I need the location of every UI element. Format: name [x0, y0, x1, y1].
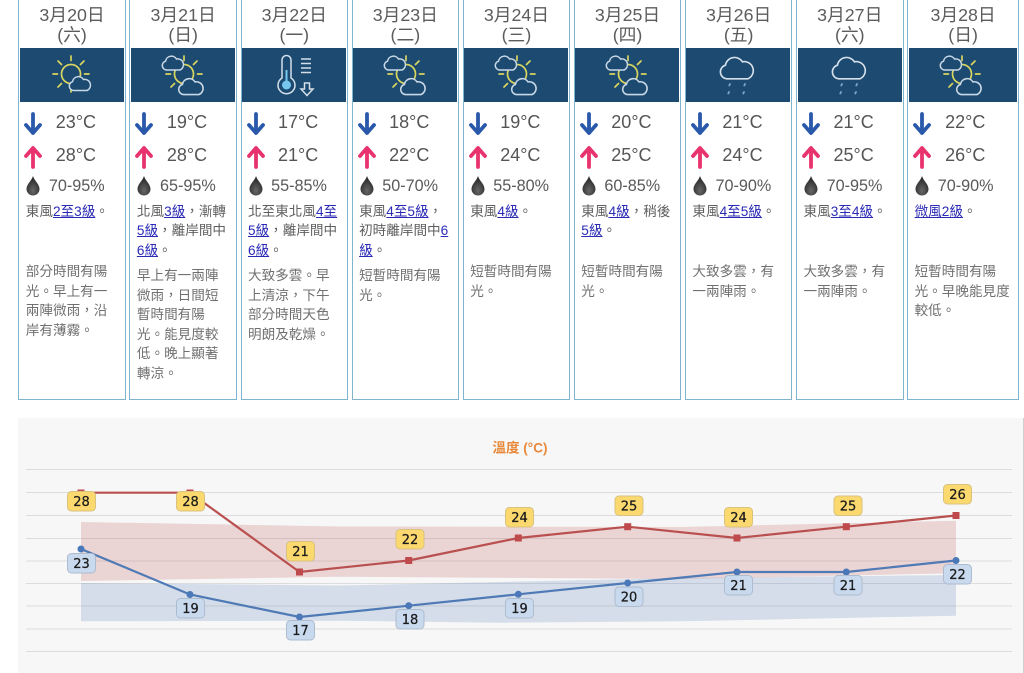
data labels: minimum temperature: 21 [730, 579, 747, 594]
data labels: minimum temperature: 23 [73, 557, 90, 572]
date [908, 5, 1018, 45]
icon: low temperature arrow [24, 112, 42, 135]
description [26, 264, 107, 338]
humidity: 70-95% [49, 177, 105, 195]
high temperature: 21°C [278, 145, 318, 165]
description: 短暫時間有陽 [470, 264, 552, 279]
wind: 北風3級，漸轉 [137, 204, 226, 219]
panel: forecast 3月20日 [18, 0, 126, 400]
weather icon: rain cloud [798, 48, 902, 102]
weather icon: sun and clouds [131, 48, 235, 102]
humidity: 55-85% [271, 177, 327, 195]
description [359, 268, 441, 302]
humidity: 60-85% [604, 177, 660, 195]
description: 明朗及乾燥。 [248, 326, 330, 342]
description: 一兩陣雨。 [692, 284, 760, 298]
date: (一) [279, 25, 309, 45]
icon: low temperature arrow [358, 112, 376, 135]
wind: 微風2級。 [915, 204, 977, 219]
humidity: 50-70% [382, 177, 438, 195]
wind: 初時離岸間中6 [359, 223, 448, 238]
date [484, 5, 549, 45]
wind: 東風4級，稍後 [581, 204, 670, 219]
description: 短暫時間有陽 [359, 268, 441, 283]
data labels: minimum temperature: 21 [840, 579, 856, 594]
description: 微雨，日間短 [137, 288, 218, 302]
date: 3月28日 [930, 5, 996, 25]
date: 3月23日 [373, 5, 438, 25]
date: (二) [391, 25, 420, 45]
date [797, 5, 902, 45]
weather icon: sun and clouds [909, 48, 1017, 102]
icon: humidity drop [360, 176, 374, 196]
icon: low temperature arrow [580, 112, 598, 135]
description: 大致多雲，有 [804, 264, 885, 279]
date: (日) [168, 25, 198, 45]
description: 光。 [581, 284, 608, 298]
data labels: maximum temperature: 24 [730, 511, 747, 526]
low temperature: 22°C [945, 112, 985, 132]
data labels: maximum temperature: 28 [182, 495, 199, 510]
date: 3月25日 [595, 5, 660, 25]
description: 一兩陣雨。 [804, 284, 871, 298]
date [151, 5, 216, 45]
date: (三) [502, 25, 531, 45]
icon: humidity drop [138, 176, 150, 196]
description: 岸有薄霧。 [26, 322, 94, 338]
low temperature: 21°C [722, 112, 763, 132]
humidity: 70-90% [938, 177, 993, 195]
description: 較低。 [915, 303, 955, 318]
low temperature: 23°C [56, 112, 96, 132]
high temperature: 28°C [167, 145, 207, 165]
weather icon: sun and clouds [353, 48, 457, 102]
high temperature: 26°C [945, 145, 985, 165]
date [262, 5, 327, 45]
icon: low temperature arrow [691, 112, 709, 135]
humidity: 55-80% [493, 177, 549, 195]
icon: high temperature arrow [24, 146, 42, 169]
line: minimum temperature [78, 546, 960, 620]
description [692, 262, 774, 301]
panel: forecast 3月26日 [685, 0, 792, 400]
icon: high temperature arrow [358, 146, 376, 169]
description: 光。 [470, 284, 497, 298]
description: 光。早上有一 [26, 284, 107, 298]
data labels: minimum temperature: 20 [621, 590, 637, 606]
wind: 東風4至5級， [359, 204, 442, 219]
wind: 東風4至5級。 [692, 204, 775, 219]
high temperature: 24°C [722, 145, 763, 165]
description: 轉涼。 [137, 366, 178, 380]
icon: humidity drop [804, 176, 818, 196]
wind: 6級。 [248, 243, 283, 258]
description: 部分時間有陽 [26, 264, 107, 279]
icon: high temperature arrow [247, 146, 265, 169]
icon: humidity drop [915, 176, 929, 196]
wind: 5級，離岸間中 [137, 223, 226, 238]
high temperature: 28°C [56, 145, 96, 165]
data labels: maximum temperature: 25 [621, 500, 637, 514]
date [595, 5, 660, 45]
high temperature: 25°C [611, 145, 652, 165]
band: average maximum range [81, 521, 956, 581]
description: 短暫時間有陽 [581, 264, 663, 279]
panel: forecast 3月23日 [352, 0, 459, 400]
description [470, 264, 552, 298]
date: 3月22日 [262, 5, 327, 25]
weather icon: sun and clouds [575, 48, 679, 102]
weather icon: thermometer falling [242, 48, 346, 102]
wind: 東風4級。 [470, 204, 532, 219]
humidity: 65-95% [160, 177, 216, 195]
low temperature: 19°C [167, 112, 207, 132]
humidity: 70-95% [827, 177, 882, 195]
date [706, 5, 771, 45]
description [804, 262, 885, 301]
icon: low temperature arrow [469, 112, 487, 135]
high temperature: 22°C [389, 145, 429, 165]
icon: low temperature arrow [247, 112, 265, 135]
icon: humidity drop [582, 176, 596, 196]
panel: forecast 3月22日 [240, 0, 348, 400]
weather icon: rain cloud [686, 48, 790, 102]
humidity: 70-90% [715, 177, 771, 195]
wind: 北至東北風4至 [248, 204, 337, 219]
low temperature: 19°C [500, 112, 540, 132]
wind [136, 204, 226, 258]
date: 3月21日 [151, 5, 216, 25]
date [373, 5, 438, 45]
wind: 6級。 [137, 243, 172, 258]
description [915, 262, 1010, 320]
data labels: maximum temperature [68, 484, 972, 561]
icon: humidity drop [26, 176, 40, 196]
description: 兩陣微雨，沿 [26, 303, 107, 318]
description: 部分時間天色 [248, 307, 330, 322]
date: (日) [948, 25, 978, 45]
description [581, 264, 663, 298]
data labels: minimum temperature [68, 554, 972, 640]
data labels: maximum temperature: 25 [840, 500, 856, 514]
data labels: maximum temperature: 28 [73, 495, 90, 510]
description: 短暫時間有陽 [915, 264, 996, 279]
panel: forecast 3月21日 [129, 0, 237, 400]
data labels: minimum temperature: 17 [292, 624, 309, 639]
data labels: maximum temperature: 26 [949, 488, 966, 503]
panel: forecast 3月25日 [574, 0, 681, 400]
wind: 東風2至3級。 [26, 204, 109, 219]
low temperature: 21°C [834, 112, 874, 132]
data labels: maximum temperature: 22 [402, 533, 418, 548]
chart title: 溫度 (°C) [493, 440, 547, 456]
low temperature: 20°C [611, 112, 652, 132]
icon: high temperature arrow [135, 146, 153, 169]
icon: high temperature arrow [469, 146, 487, 169]
icon: high temperature arrow [580, 146, 598, 169]
description: 光。能見度較 [137, 326, 218, 342]
description [137, 268, 218, 380]
data labels: minimum temperature: 22 [949, 568, 966, 583]
date: 3月27日 [817, 5, 882, 25]
description [248, 268, 330, 342]
data labels: maximum temperature: 24 [511, 511, 528, 526]
data labels: minimum temperature: 19 [511, 602, 528, 617]
panel: forecast 3月28日 [907, 0, 1019, 400]
high temperature: 25°C [834, 145, 874, 165]
date: 3月26日 [706, 5, 771, 25]
low temperature: 17°C [278, 112, 318, 132]
weather icon: sun and clouds [464, 48, 568, 102]
band: average minimum range [81, 575, 956, 623]
wind: 5級。 [581, 223, 616, 238]
date: (五) [724, 25, 753, 45]
data labels: minimum temperature: 19 [182, 602, 199, 617]
data labels: minimum temperature: 18 [402, 613, 418, 628]
data labels: maximum temperature: 21 [292, 545, 309, 560]
icon: humidity drop [250, 176, 262, 196]
icon: humidity drop [472, 176, 484, 196]
description: 暫時間有陽 [137, 307, 205, 322]
description: 光。早晚能見度 [915, 284, 1010, 298]
description: 早上有一兩陣 [137, 268, 218, 283]
low temperature: 18°C [389, 112, 429, 132]
wind: 5級，離岸間中 [248, 223, 337, 238]
high temperature: 24°C [500, 145, 540, 165]
description: 低。晚上顯著 [137, 346, 218, 361]
icon: high temperature arrow [691, 146, 709, 169]
panel: temperature chart [18, 418, 1024, 673]
line: maximum temperature [78, 490, 960, 576]
date: 3月24日 [484, 5, 549, 25]
icon: low temperature arrow [912, 112, 932, 136]
date: (六) [835, 25, 865, 45]
date: (四) [613, 25, 642, 45]
date [39, 5, 105, 45]
icon: low temperature arrow [801, 112, 821, 136]
icon: humidity drop [694, 176, 706, 196]
wind [359, 204, 448, 258]
wind: 級。 [359, 243, 386, 258]
description: 上清涼，下午 [248, 288, 330, 302]
date: (六) [57, 25, 87, 45]
panel: forecast 3月27日 [796, 0, 904, 400]
icon: high temperature arrow [801, 144, 821, 168]
date: 3月20日 [39, 5, 105, 25]
wind [581, 204, 670, 238]
icon: low temperature arrow [135, 112, 153, 135]
description: 光。 [359, 288, 386, 302]
wind [248, 204, 338, 258]
description: 大致多雲，有 [692, 264, 774, 279]
wind: 東風3至4級。 [804, 204, 887, 219]
panel: forecast 3月24日 [463, 0, 570, 400]
icon: high temperature arrow [912, 144, 932, 168]
description: 大致多雲。早 [248, 268, 330, 283]
weather icon: sun and cloud [20, 48, 124, 102]
